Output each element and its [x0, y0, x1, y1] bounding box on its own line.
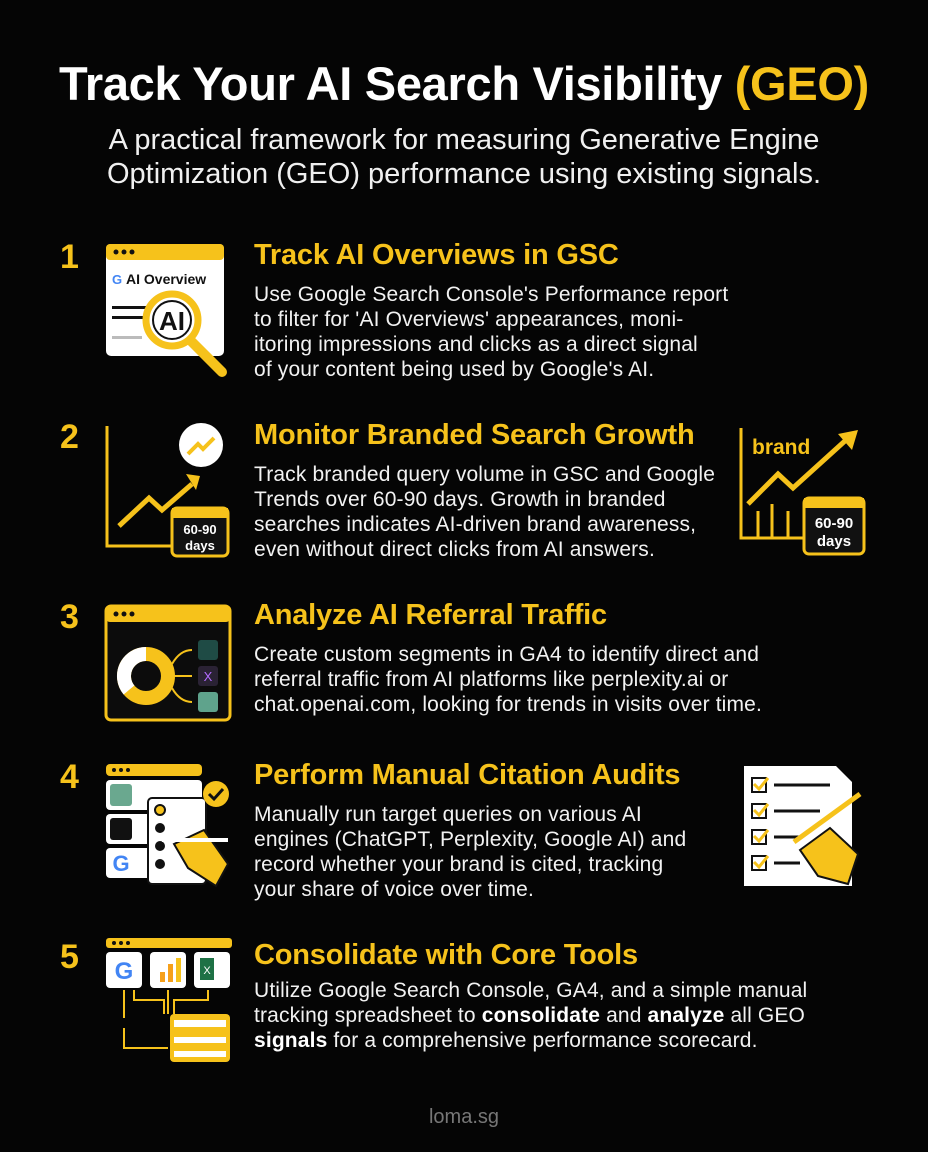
- body 3: referral traffic from AI platforms like perplexity.ai or: [254, 668, 728, 691]
- number 3: 3: [60, 598, 79, 636]
- body 2: even without direct clicks from AI answers.: [254, 538, 655, 561]
- icon: brand chart: [740, 428, 866, 556]
- icon: growth chart: 60-90: [183, 522, 217, 537]
- subtitle: [107, 124, 821, 190]
- icon: brand chart: brand: [752, 436, 810, 459]
- number 4: 4: [60, 758, 79, 796]
- body 4: [254, 803, 686, 901]
- heading 5: Consolidate with Core Tools: [254, 939, 638, 971]
- body 2: Trends over 60-90 days. Growth in branded: [254, 488, 666, 511]
- title: Track Your AI Search Visibility (GEO): [59, 57, 869, 110]
- subtitle: Optimization (GEO) performance using existing signals.: [107, 158, 821, 190]
- body 5: [254, 979, 807, 1052]
- heading 1: Track AI Overviews in GSC: [254, 239, 619, 271]
- icon: core tools: X: [203, 965, 211, 977]
- icon: brand chart: days: [817, 533, 851, 550]
- body 1: Use Google Search Console's Performance report: [254, 283, 728, 306]
- number 1: 1: [60, 238, 79, 276]
- subtitle: A practical framework for measuring Generative Engine: [109, 124, 819, 156]
- icon: core tools: [106, 938, 232, 1062]
- heading 4: Perform Manual Citation Audits: [254, 759, 680, 791]
- body 2: [254, 463, 715, 561]
- footer: loma.sg: [429, 1106, 499, 1128]
- icon: growth chart: [106, 423, 230, 558]
- icon: AI overview magnifier: AI: [159, 306, 185, 336]
- body 5: tracking spreadsheet to consolidate and analyze all GEO: [254, 1004, 805, 1027]
- icon: AI overview magnifier: G: [112, 272, 122, 287]
- section 5: [60, 938, 807, 1062]
- body 3: [254, 643, 762, 716]
- section 4: [60, 758, 862, 901]
- body 5: Utilize Google Search Console, GA4, and a simple manual: [254, 979, 807, 1002]
- body 3: chat.openai.com, looking for trends in visits over time.: [254, 693, 762, 716]
- icon: AI overview magnifier: AI Overview: [126, 271, 206, 287]
- body 2: searches indicates AI-driven brand awareness,: [254, 513, 696, 536]
- body 1: itoring impressions and clicks as a direct signal: [254, 333, 698, 356]
- icon: citation audit: [106, 764, 229, 887]
- body 3: Create custom segments in GA4 to identify direct and: [254, 643, 759, 666]
- body 5: signals for a comprehensive performance scorecard.: [254, 1029, 758, 1052]
- section 3: [60, 598, 762, 722]
- body 2: Track branded query volume in GSC and Google: [254, 463, 715, 486]
- body 4: your share of voice over time.: [254, 878, 534, 901]
- icon: brand chart: 60-90: [815, 515, 853, 532]
- body 4: record whether your brand is cited, tracking: [254, 853, 663, 876]
- icon: referral donut: [104, 604, 232, 722]
- heading 2: Monitor Branded Search Growth: [254, 419, 695, 451]
- icon: citation audit: G: [112, 851, 130, 876]
- number 2: 2: [60, 418, 79, 456]
- body 4: engines (ChatGPT, Perplexity, Google AI) and: [254, 828, 686, 851]
- section 2: [60, 418, 866, 561]
- icon: referral donut: X: [204, 669, 213, 684]
- body 4: Manually run target queries on various AI: [254, 803, 642, 826]
- icon: core tools: G: [115, 958, 133, 985]
- body 1: of your content being used by Google's AI.: [254, 358, 654, 381]
- number 5: 5: [60, 938, 79, 976]
- icon: AI overview magnifier: [106, 244, 227, 377]
- section 1: [60, 238, 728, 381]
- icon: growth chart: days: [185, 538, 215, 553]
- body 1: [254, 283, 728, 381]
- body 1: to filter for 'AI Overviews' appearances, moni-: [254, 308, 683, 331]
- heading 3: Analyze AI Referral Traffic: [254, 599, 607, 631]
- icon: checklist: [744, 766, 862, 886]
